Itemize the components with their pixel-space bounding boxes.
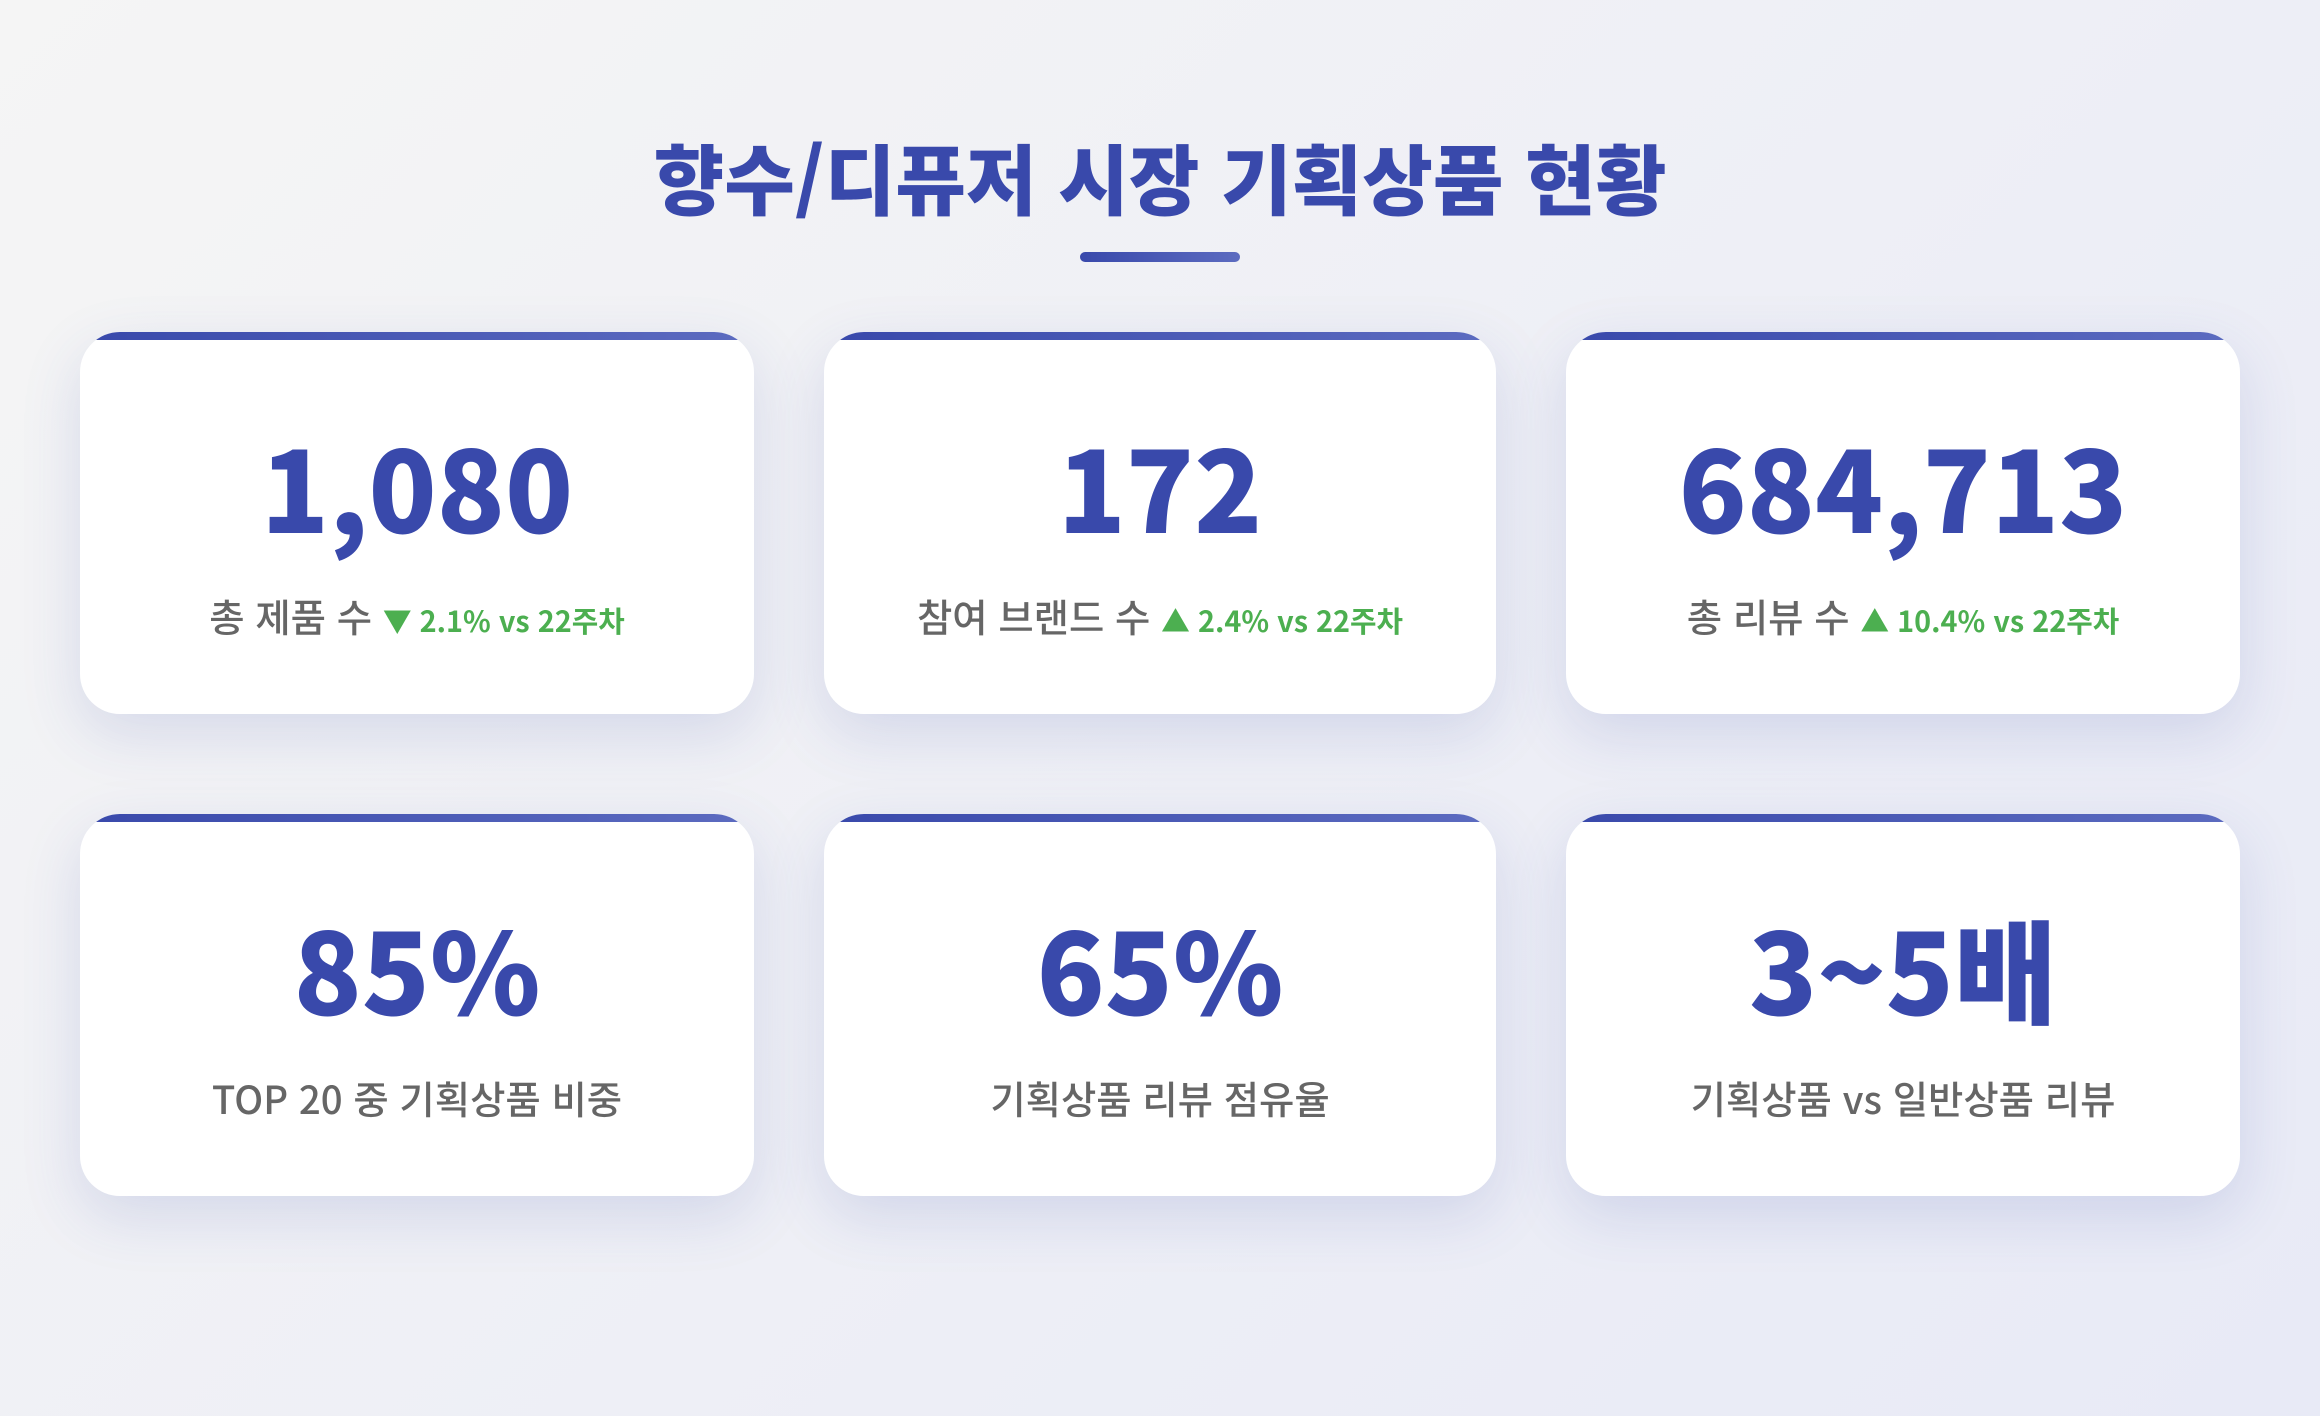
value: 65%: 65% bbox=[1037, 886, 1283, 1048]
value: 1,080: 1,080 bbox=[261, 404, 573, 566]
label: share in top 20: TOP 20 중 기획상품 비중 bbox=[212, 1070, 622, 1126]
label: total products with change: 총 제품 수 ▼ 2.1% vs 22주차 bbox=[209, 588, 625, 644]
card accent bar bbox=[80, 332, 754, 340]
card accent bar bbox=[824, 332, 1496, 340]
panel: total products bbox=[80, 332, 754, 714]
title: 향수/디퓨저 시장 기획상품 현황 bbox=[654, 121, 1666, 232]
panel: review multiple bbox=[1566, 814, 2240, 1196]
title underline bbox=[1080, 252, 1240, 262]
panel: participating brands bbox=[824, 332, 1496, 714]
label: total reviews with change: 총 리뷰 수 ▲ 10.4% vs 22주차 bbox=[1687, 588, 2119, 644]
card accent bar bbox=[824, 814, 1496, 822]
card accent bar bbox=[1566, 814, 2240, 822]
label: participating brands with change: 참여 브랜드 수 ▲ 2.4% vs 22주차 bbox=[917, 588, 1403, 644]
card accent bar bbox=[80, 814, 754, 822]
value: 172: 172 bbox=[1058, 404, 1262, 566]
label: review multiple: 기획상품 vs 일반상품 리뷰 bbox=[1691, 1070, 2115, 1126]
value: 85%: 85% bbox=[294, 886, 540, 1048]
panel: review share bbox=[824, 814, 1496, 1196]
panel: share in top 20 bbox=[80, 814, 754, 1196]
card accent bar bbox=[1566, 332, 2240, 340]
value: 3~5배: 3~5배 bbox=[1749, 886, 2057, 1048]
label: review share: 기획상품 리뷰 점유율 bbox=[990, 1070, 1330, 1126]
panel: total reviews bbox=[1566, 332, 2240, 714]
value: 684,713: 684,713 bbox=[1679, 404, 2127, 566]
